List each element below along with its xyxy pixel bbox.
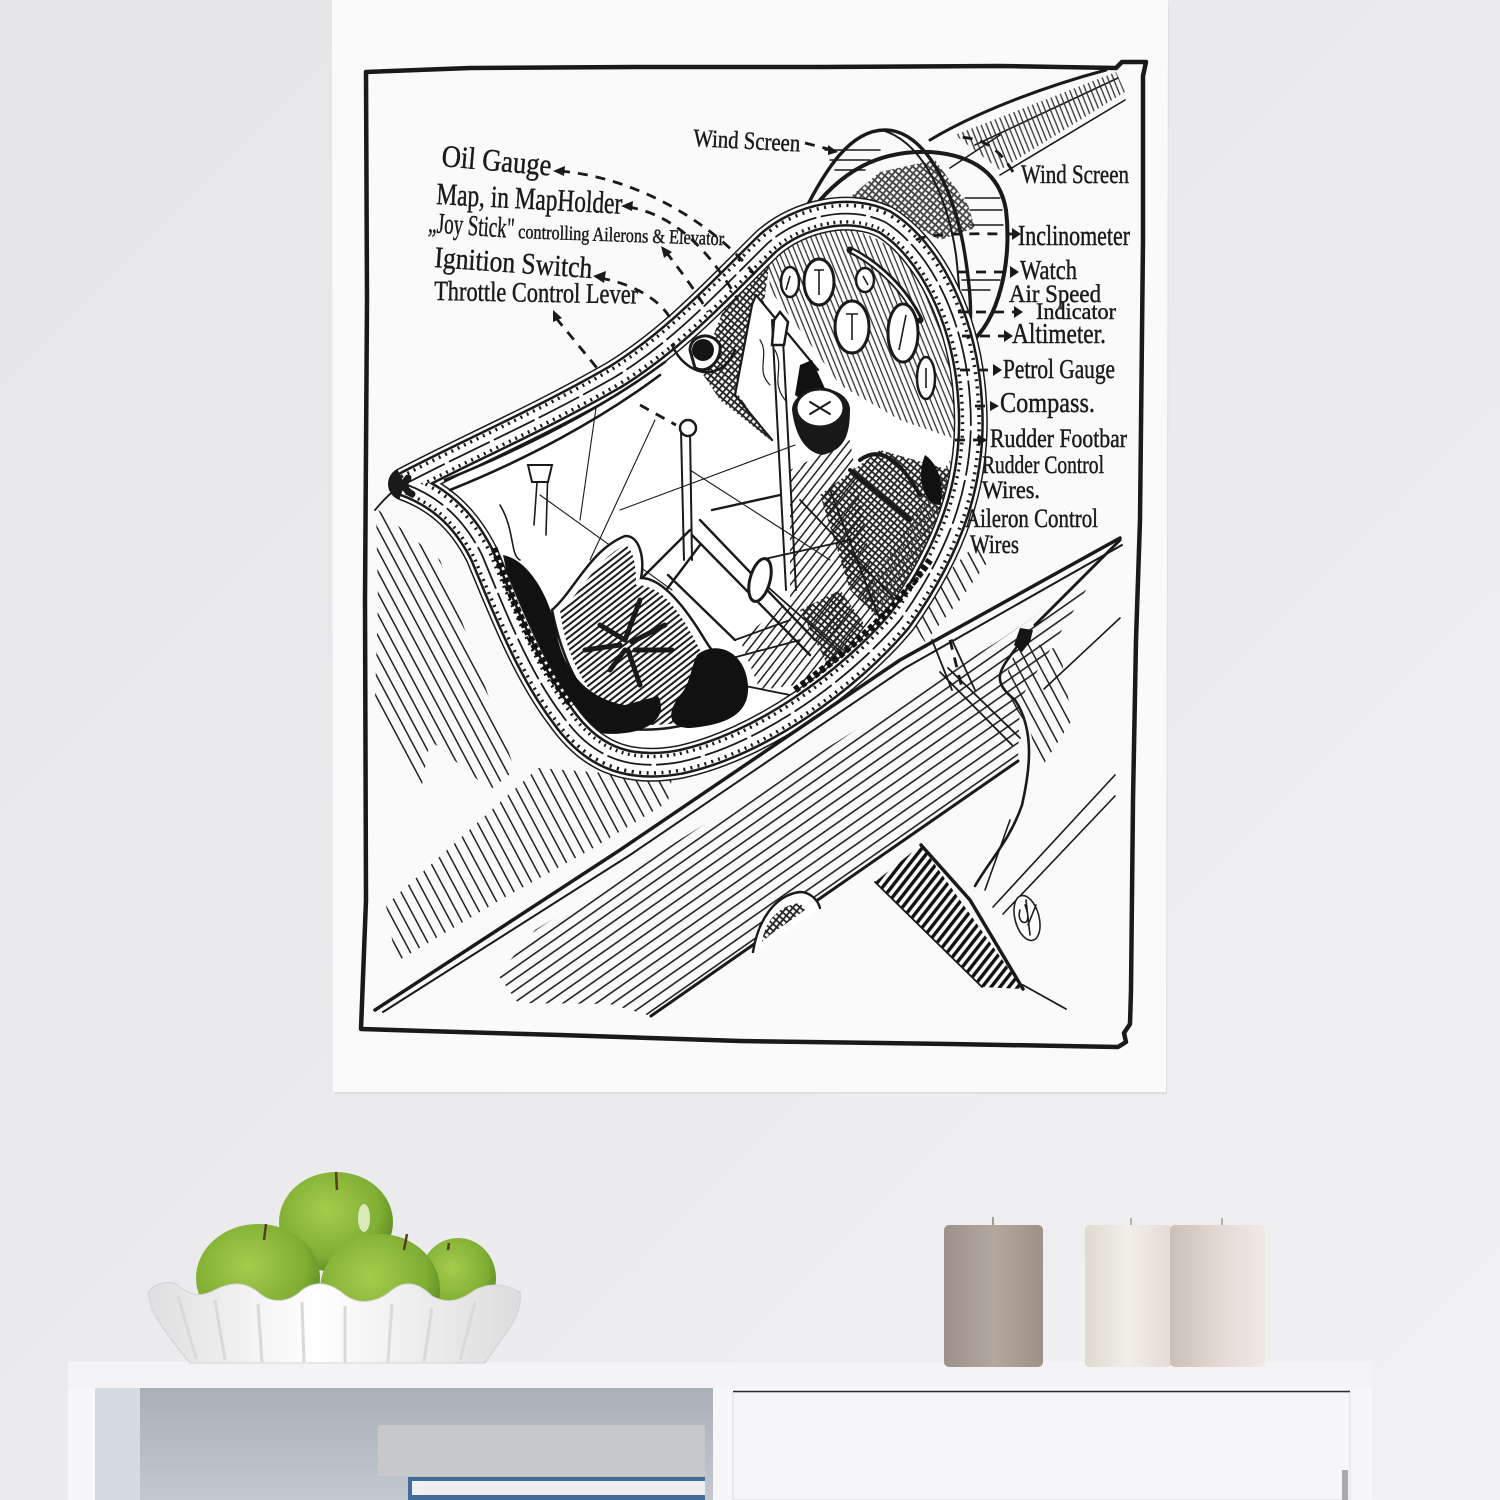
fruit bowl [148,1283,520,1363]
apples [196,1172,496,1346]
label: Watch: Watch [1020,255,1077,285]
candle: beige [1170,1218,1265,1367]
drawer front [733,1392,1350,1500]
label: Petrol Gauge: Petrol Gauge [1003,354,1115,384]
label: Wind Screen right: Wind Screen [1021,160,1129,189]
aileron [975,540,1120,914]
label: Inclinometer: Inclinometer [1018,220,1130,252]
label: Map, in Map Holder: Map, in MapHolder [436,176,624,221]
label: Rudder Control Wires: Wires. [982,477,1040,504]
gauges [781,259,935,399]
label: Air Speed Indicator: Air Speed [1009,281,1101,308]
drawer handle [1342,1470,1348,1500]
label: Rudder Footbar: Rudder Footbar [990,424,1127,453]
label: Compass: Compass. [1000,388,1095,419]
label: Altimeter: Altimeter. [1012,319,1106,350]
label: Aileron Control Wires [965,504,1098,559]
candle: white [1085,1218,1171,1367]
label: Aileron Control Wires: Wires [970,530,1019,559]
shelf top [68,1362,1372,1388]
books [378,1425,705,1500]
frame: hand-drawn border [361,62,1146,1047]
pilot seat [503,536,748,734]
cockpit interior [375,214,971,765]
label: Rudder Control Wires [982,452,1104,504]
label: Joy Stick [428,207,725,250]
label: Aileron Control Wires: Aileron Control [965,504,1098,533]
rudder bar [850,454,942,520]
tail strut [875,845,1066,1009]
instrument panel [700,228,960,690]
dashed leader arrows [553,137,1023,688]
wind screen frame [803,130,1007,370]
label: Air Speed Indicator [1009,281,1116,324]
label: Air Speed Indicator: Indicator [1036,299,1116,324]
compass [792,389,850,455]
signature [1009,893,1045,943]
label: Rudder Control Wires: Rudder Control [982,452,1104,479]
sideboard [68,1362,1372,1500]
cockpit rim [375,214,971,765]
open shelf cavity [95,1388,713,1500]
label: Oil Gauge: Oil Gauge [440,138,553,183]
tapestry [332,0,1169,1094]
label: Throttle Control Lever: Throttle Control Lever [434,276,639,311]
wing inspection hatch [753,892,820,952]
joystick and struts [500,312,830,590]
fuselage hatching [375,508,992,962]
label: Ignition Switch: Ignition Switch [434,241,593,285]
candle: taupe [944,1217,1043,1367]
label: Wind Screen top: Wind Screen [693,125,801,158]
label: Joy Stick: controlling Ailerons & Elevator [518,221,725,250]
rear fuselage and wind screen hatching [825,70,1125,290]
label: Joy Stick: „Joy Stick" [428,207,516,245]
floor frame [642,490,895,696]
wing [375,538,1122,1016]
